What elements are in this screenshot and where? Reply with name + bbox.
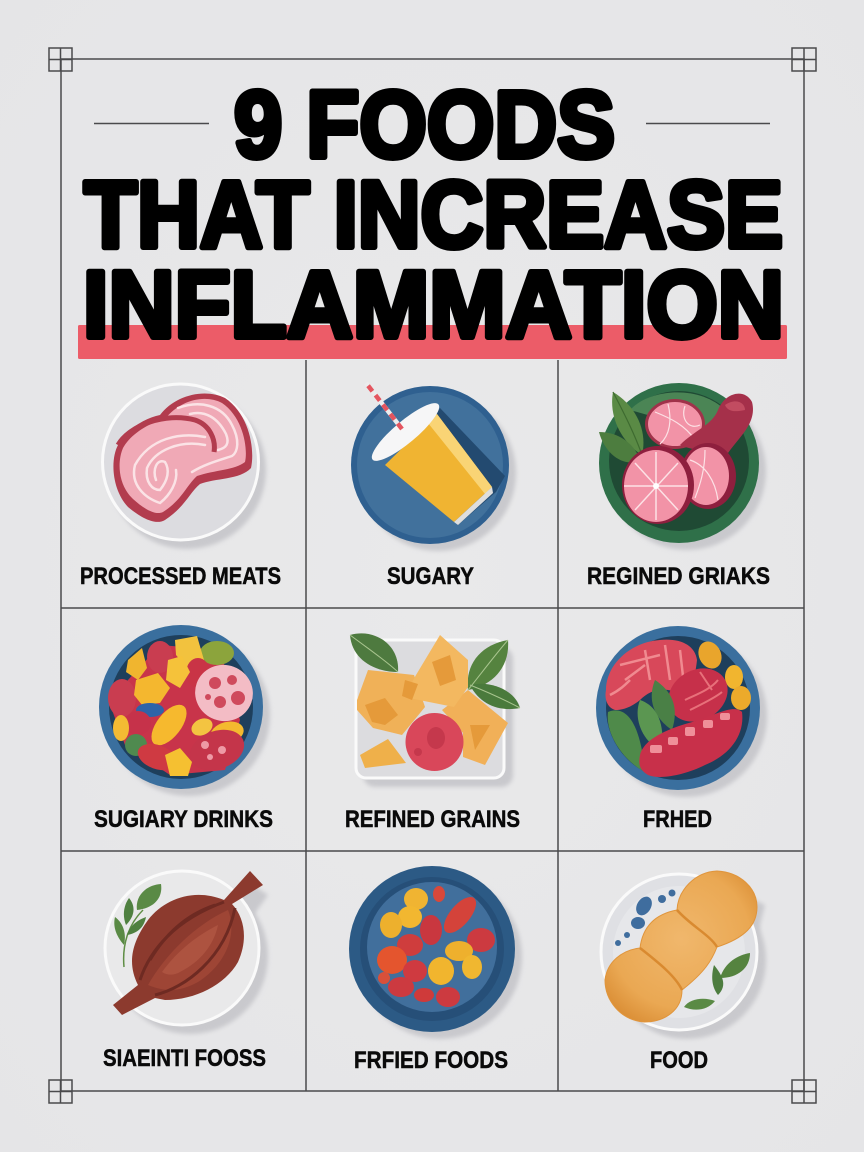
panel: refined grains (306, 608, 558, 851)
icon: bread on plate (601, 871, 766, 1039)
icon: dark meat on plate (105, 871, 268, 1034)
icon: fried bites in blue bowl (349, 866, 522, 1039)
label: FRHED (643, 806, 712, 833)
title: 9 FOODS (234, 72, 615, 178)
title: INFLAMMATION (83, 252, 784, 358)
panel: frfied foods (306, 851, 558, 1091)
icon: fruit bowl (99, 625, 270, 796)
panel: sugiary drinks (61, 608, 306, 851)
icon: sliced sausage on green bowl (599, 383, 766, 550)
icon: sliced meat on plate (102, 384, 266, 549)
panel: frhed (558, 608, 804, 851)
title: THAT INCREASE (84, 162, 783, 268)
label: SUGARY (387, 563, 474, 590)
panel: siaeinti fooss (61, 851, 306, 1091)
icon: red meat bowl (596, 626, 767, 797)
label: FOOD (650, 1047, 708, 1074)
icon detail: lid (365, 396, 446, 468)
label: PROCESSED MEATS (80, 563, 281, 590)
panel: processed meats (61, 360, 306, 608)
icon: drink cup on blue plate (351, 383, 516, 551)
icon: crackers on tray (350, 633, 520, 787)
label: SUGIARY DRINKS (94, 806, 273, 833)
title (83, 72, 784, 358)
panel: food (558, 851, 804, 1091)
panel: regined griaks (558, 360, 804, 608)
title highlight bar (78, 325, 787, 359)
label: REGINED GRIAKS (587, 563, 770, 590)
panel: sugary (306, 360, 558, 608)
label: REFINED GRAINS (345, 806, 520, 833)
label: SIAEINTI FOOSS (103, 1045, 266, 1072)
label: FRFIED FOODS (354, 1047, 508, 1074)
